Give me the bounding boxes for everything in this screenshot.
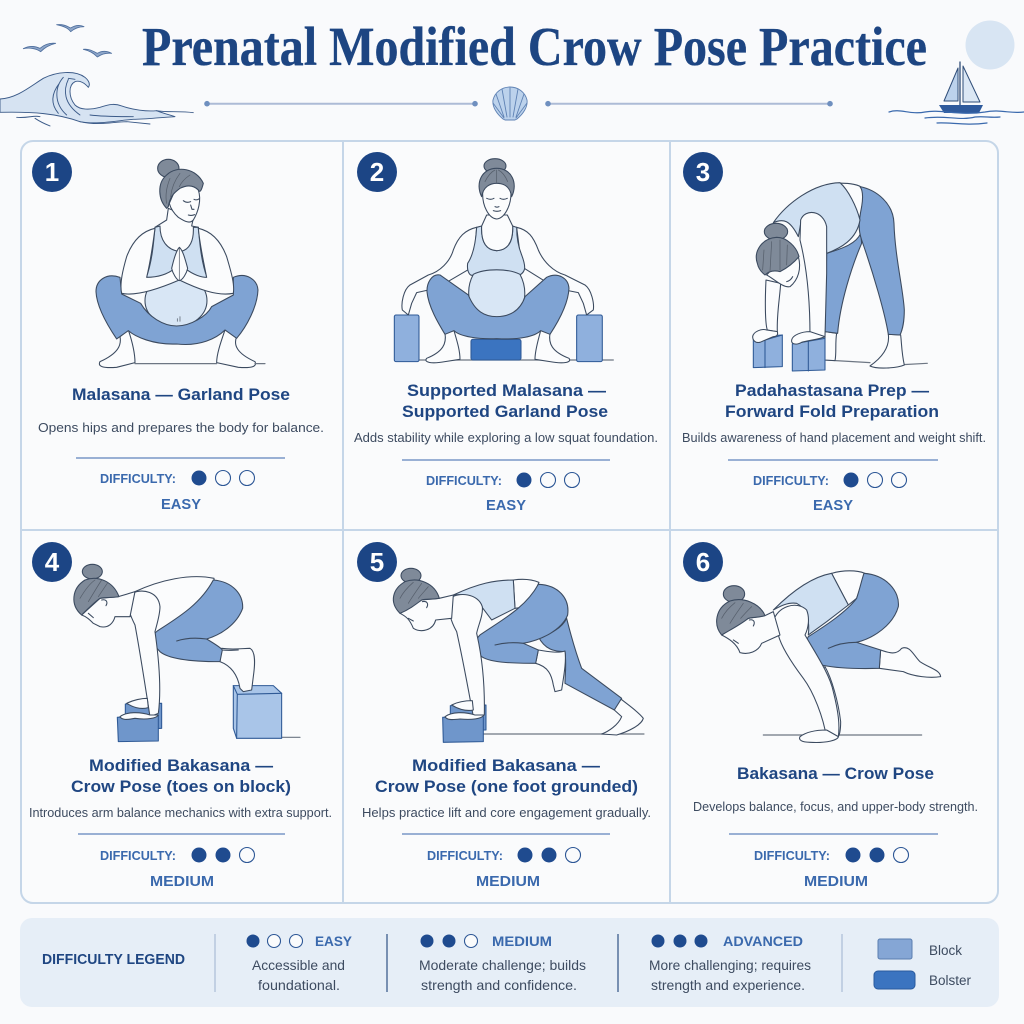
heading: Bakasana — Crow Pose [737,765,934,783]
difficulty rating: EASY [813,498,853,514]
legend: medium [419,933,586,993]
description: Introduces arm balance mechanics with extra support. [29,805,332,820]
legend: medium: Moderate challenge; builds [419,957,586,973]
legend: easy [246,933,353,993]
icon: birds [23,25,112,57]
heading [402,382,608,421]
badge: 2 [357,152,397,192]
panel: step 5 [357,542,651,890]
heading: Forward Fold Preparation [725,403,939,421]
icon: sailboat [889,62,1024,124]
heading: Malasana — Garland Pose [72,386,290,404]
badge: 2: 2 [370,157,384,187]
legend heading: DIFFICULTY LEGEND [42,952,185,968]
badge: 1: 1 [45,157,59,187]
description: Adds stability while exploring a low squat foundation. [354,430,658,445]
heading: Crow Pose (toes on block) [71,778,291,796]
figure: Bakasana [717,571,941,742]
description: Opens hips and prepares the body for balance. [38,420,324,435]
figure: Supported Malasana [394,159,613,363]
legend: props: Bolster [929,973,971,988]
badge: 6: 6 [696,547,710,577]
difficulty rating: EASY [486,498,526,514]
heading: Modified Bakasana — [89,757,274,775]
panel: step 3 [682,152,986,514]
legend: props [874,939,971,989]
panel: step 6 [683,542,978,890]
heading [71,757,291,796]
difficulty rating [100,848,254,890]
panel: step 4 [29,542,332,890]
heading: Supported Garland Pose [402,403,608,421]
panel: step 1 [32,152,324,513]
icon: seashell [493,87,527,120]
description: Helps practice lift and core engagement gradually. [362,805,651,820]
badge: 4: 4 [45,547,60,577]
badge: 3: 3 [696,157,710,187]
difficulty rating [754,848,908,890]
legend: advanced: More challenging; requires [649,957,811,973]
difficulty rating [427,848,580,890]
legend: advanced [649,933,811,993]
panel: step 2 [354,152,658,514]
badge: 3 [683,152,723,192]
figure: Modified Bakasana toes on block [74,564,300,742]
legend: medium: strength and confidence. [421,977,577,993]
badge: 5 [357,542,397,582]
heading: Supported Malasana — [407,382,607,400]
divider: header right [545,101,833,106]
legend: props: Block [929,943,962,958]
description: Develops balance, focus, and upper-body strength. [693,799,978,814]
difficulty rating: EASY [161,497,201,513]
difficulty rating: DIFFICULTY: [426,474,502,488]
badge: 4 [32,542,72,582]
difficulty rating: MEDIUM [150,874,214,890]
difficulty rating: DIFFICULTY: [100,472,176,486]
divider: header left [204,101,478,106]
blocks and bolster [394,315,602,362]
icon: sun [966,20,1014,70]
panel: difficulty legend [20,918,999,1007]
legend: advanced: strength and experience. [651,977,805,993]
legend: medium: MEDIUM [492,933,552,949]
icon: ocean wave [0,73,193,126]
difficulty rating: MEDIUM [476,874,540,890]
legend: easy: foundational. [258,977,340,993]
title: Prenatal Modified Crow Pose Practice [142,16,927,77]
legend: easy: Accessible and [252,957,345,973]
figure: Padahastasana Prep [753,183,927,371]
difficulty rating [753,472,906,514]
heading: Padahastasana Prep — [735,382,930,400]
figure: Malasana [96,159,265,368]
difficulty rating: DIFFICULTY: [754,849,830,863]
heading: Modified Bakasana — [412,757,601,775]
difficulty rating [426,472,580,514]
badge: 5: 5 [370,547,384,577]
heading: Crow Pose (one foot grounded) [375,778,638,796]
heading [375,757,638,796]
difficulty rating: DIFFICULTY: [753,474,829,488]
heading [725,382,939,421]
description: Builds awareness of hand placement and weight shift. [682,430,986,445]
panel frame: pose grid [21,141,998,903]
badge: 6 [683,542,723,582]
legend: advanced: ADVANCED [723,933,803,949]
difficulty rating [100,470,254,513]
difficulty rating: MEDIUM [804,874,868,890]
badge: 1 [32,152,72,192]
difficulty rating: DIFFICULTY: [427,849,503,863]
difficulty rating: DIFFICULTY: [100,849,176,863]
figure: Modified Bakasana one foot grounded [393,568,644,742]
legend: easy: EASY [315,933,353,949]
